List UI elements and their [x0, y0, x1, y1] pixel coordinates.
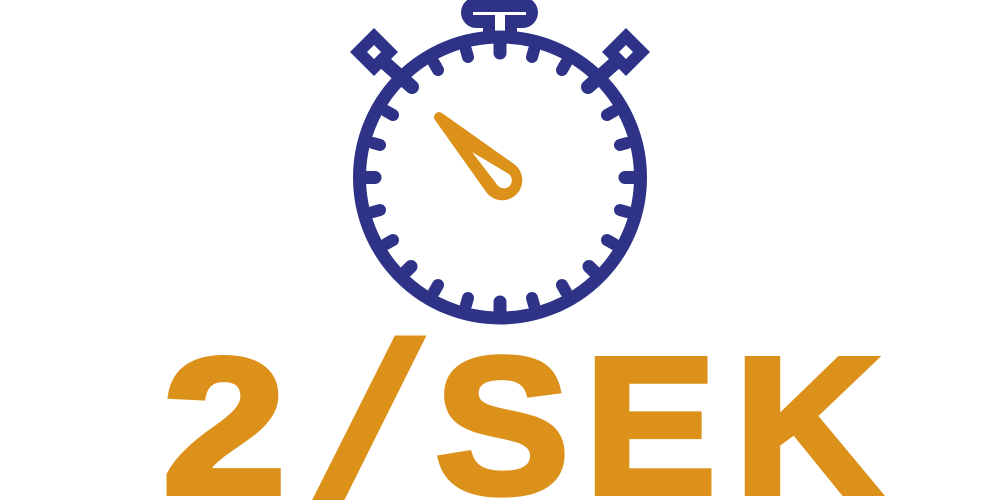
stopwatch right button [602, 28, 650, 76]
title: 2/SEK [162, 299, 880, 500]
stopwatch ring [360, 37, 640, 318]
stopwatch crown [461, 0, 538, 36]
stopwatch needle [434, 112, 522, 200]
stopwatch left button [350, 28, 398, 76]
stopwatch button stems [385, 63, 615, 87]
icon: stopwatch [350, 0, 650, 318]
stopwatch tick marks [362, 40, 638, 315]
